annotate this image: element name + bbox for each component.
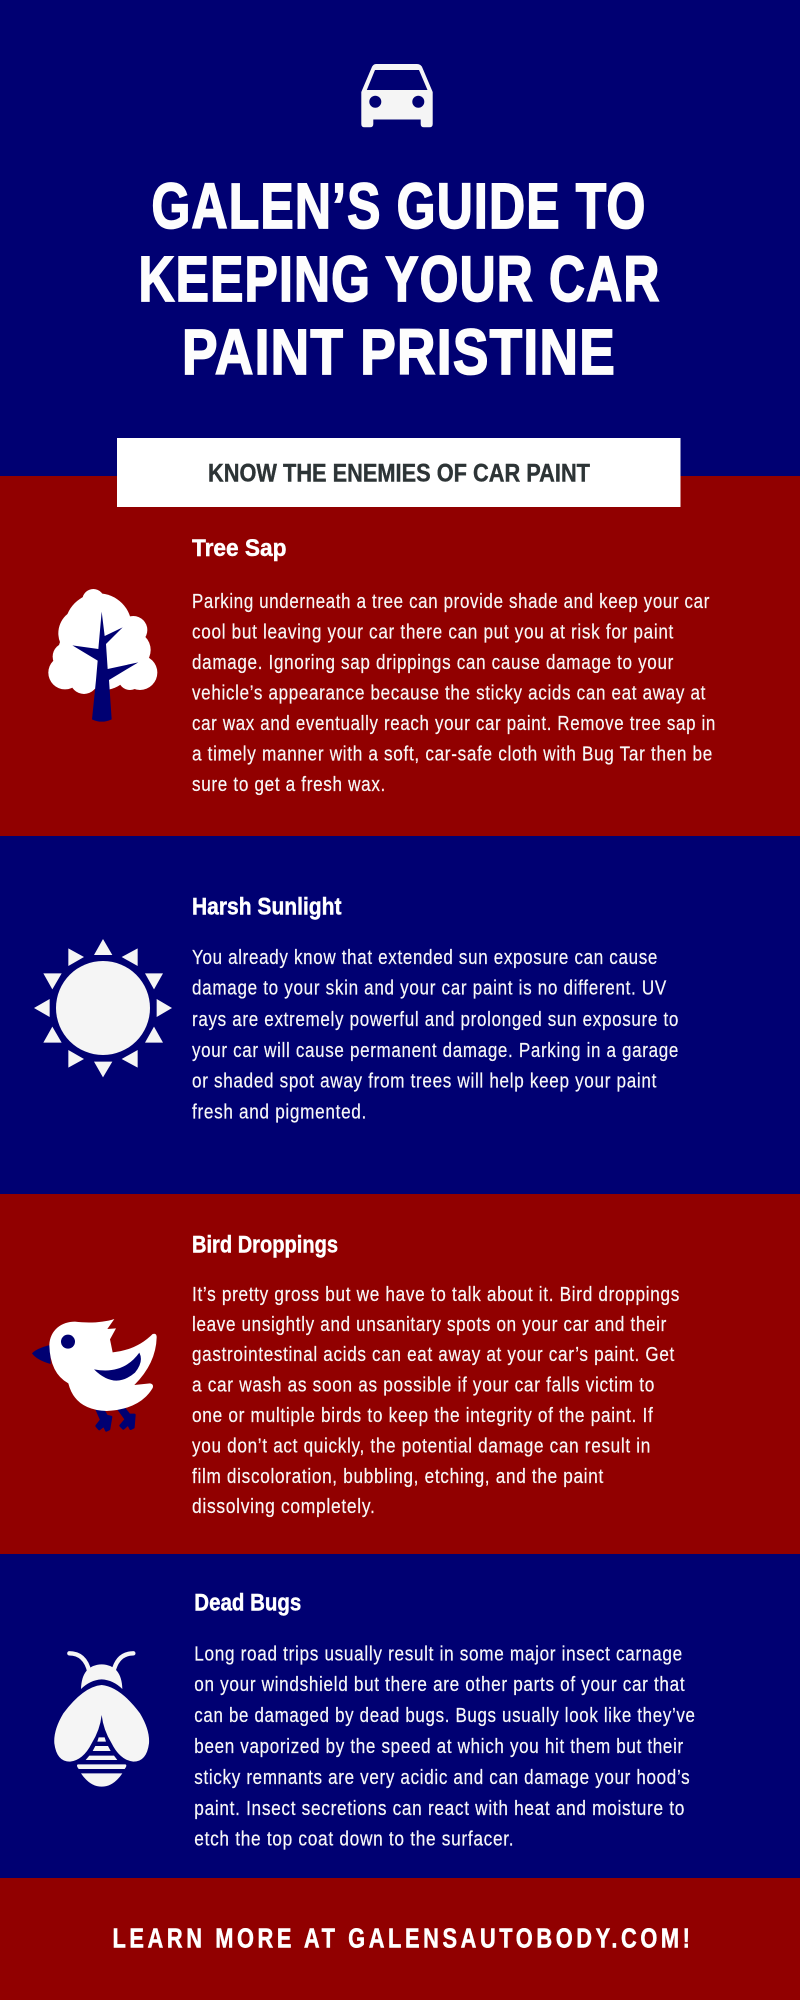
body text: dead bugs: Long road trips usually result in some major insect carnage	[194, 1643, 683, 1665]
body text: dead bugs: sticky remnants are very acidic and can damage your hood’s	[194, 1767, 690, 1789]
dead bugs background	[0, 1554, 800, 1878]
body text: harsh sunlight: or shaded spot away from trees will help keep your paint	[192, 1071, 657, 1093]
body text: harsh sunlight	[192, 947, 679, 1123]
panel: tree sap	[0, 476, 800, 836]
body text: dead bugs: paint. Insect secretions can react with heat and moisture to	[194, 1798, 685, 1820]
body text: bird droppings	[192, 1284, 680, 1518]
harsh sunlight background	[0, 836, 800, 1194]
body text: tree sap: damage. Ignoring sap drippings can cause damage to your	[192, 652, 674, 674]
section banner	[117, 438, 680, 507]
tree sap background	[0, 476, 800, 836]
panel: footer	[0, 1878, 800, 2000]
body text: tree sap: a timely manner with a soft, car-safe cloth with Bug Tar then be	[192, 744, 713, 766]
heading: dead bugs: Dead Bugs	[194, 1590, 301, 1617]
bird droppings background	[0, 1194, 800, 1554]
body text: dead bugs: can be damaged by dead bugs. Bugs usually look like they’ve	[194, 1705, 696, 1727]
panel: harsh sunlight	[0, 836, 800, 1194]
banner box	[117, 438, 680, 507]
icon: bird	[32, 1319, 157, 1430]
body text: bird droppings: leave unsightly and unsanitary spots on your car and their	[192, 1314, 667, 1336]
banner text: KNOW THE ENEMIES OF CAR PAINT	[208, 460, 590, 488]
body text: bird droppings: gastrointestinal acids can eat away at your car’s paint. Get	[192, 1344, 675, 1366]
title: PAINT PRISTINE	[182, 316, 616, 388]
body text: dead bugs: etch the top coat down to the surfacer.	[194, 1829, 514, 1851]
heading: tree sap: Tree Sap	[192, 535, 286, 562]
body text: tree sap: cool but leaving your car there can put you at risk for paint	[192, 622, 674, 644]
panel: bird droppings	[0, 1194, 800, 1554]
panel: dead bugs	[0, 1554, 800, 1878]
title	[138, 170, 660, 388]
body text: harsh sunlight: You already know that extended sun exposure can cause	[192, 947, 658, 969]
body text: dead bugs	[194, 1643, 696, 1851]
icon: tree	[48, 589, 157, 722]
title: GALEN’S GUIDE TO	[152, 170, 646, 242]
heading: harsh sunlight: Harsh Sunlight	[192, 894, 342, 921]
body text: bird droppings: you don’t act quickly, the potential damage can result in	[192, 1435, 651, 1457]
body text: tree sap: vehicle’s appearance because the sticky acids can eat away at	[192, 682, 706, 704]
panel: header	[0, 0, 800, 476]
icon: sun	[34, 939, 172, 1077]
body text: harsh sunlight: damage to your skin and your car paint is no different. UV	[192, 978, 667, 1000]
body text: bird droppings: a car wash as soon as possible if your car falls victim to	[192, 1375, 655, 1397]
icon: bug	[54, 1653, 149, 1787]
footer background	[0, 1878, 800, 2000]
body text: bird droppings: dissolving completely.	[192, 1496, 376, 1518]
body text: dead bugs: on your windshield but there are other parts of your car that	[194, 1674, 685, 1696]
header background	[0, 0, 800, 476]
body text: harsh sunlight: rays are extremely powerful and prolonged sun exposure to	[192, 1009, 679, 1031]
body text: tree sap: sure to get a fresh wax.	[192, 774, 386, 796]
body text: dead bugs: been vaporized by the speed at which you hit them but their	[194, 1736, 684, 1758]
icon: car	[361, 64, 433, 127]
body text: bird droppings: one or multiple birds to keep the integrity of the paint. If	[192, 1405, 654, 1427]
heading: bird droppings: Bird Droppings	[192, 1232, 338, 1259]
body text: bird droppings: film discoloration, bubbling, etching, and the paint	[192, 1466, 604, 1488]
body text: harsh sunlight: your car will cause permanent damage. Parking in a garage	[192, 1040, 679, 1062]
body text: tree sap	[192, 591, 716, 796]
body text: tree sap: Parking underneath a tree can provide shade and keep your car	[192, 591, 710, 613]
body text: tree sap: car wax and eventually reach your car paint. Remove tree sap in	[192, 713, 716, 735]
body text: bird droppings: It’s pretty gross but we have to talk about it. Bird droppings	[192, 1284, 680, 1306]
title: KEEPING YOUR CAR	[138, 243, 660, 315]
body text: harsh sunlight: fresh and pigmented.	[192, 1101, 367, 1123]
